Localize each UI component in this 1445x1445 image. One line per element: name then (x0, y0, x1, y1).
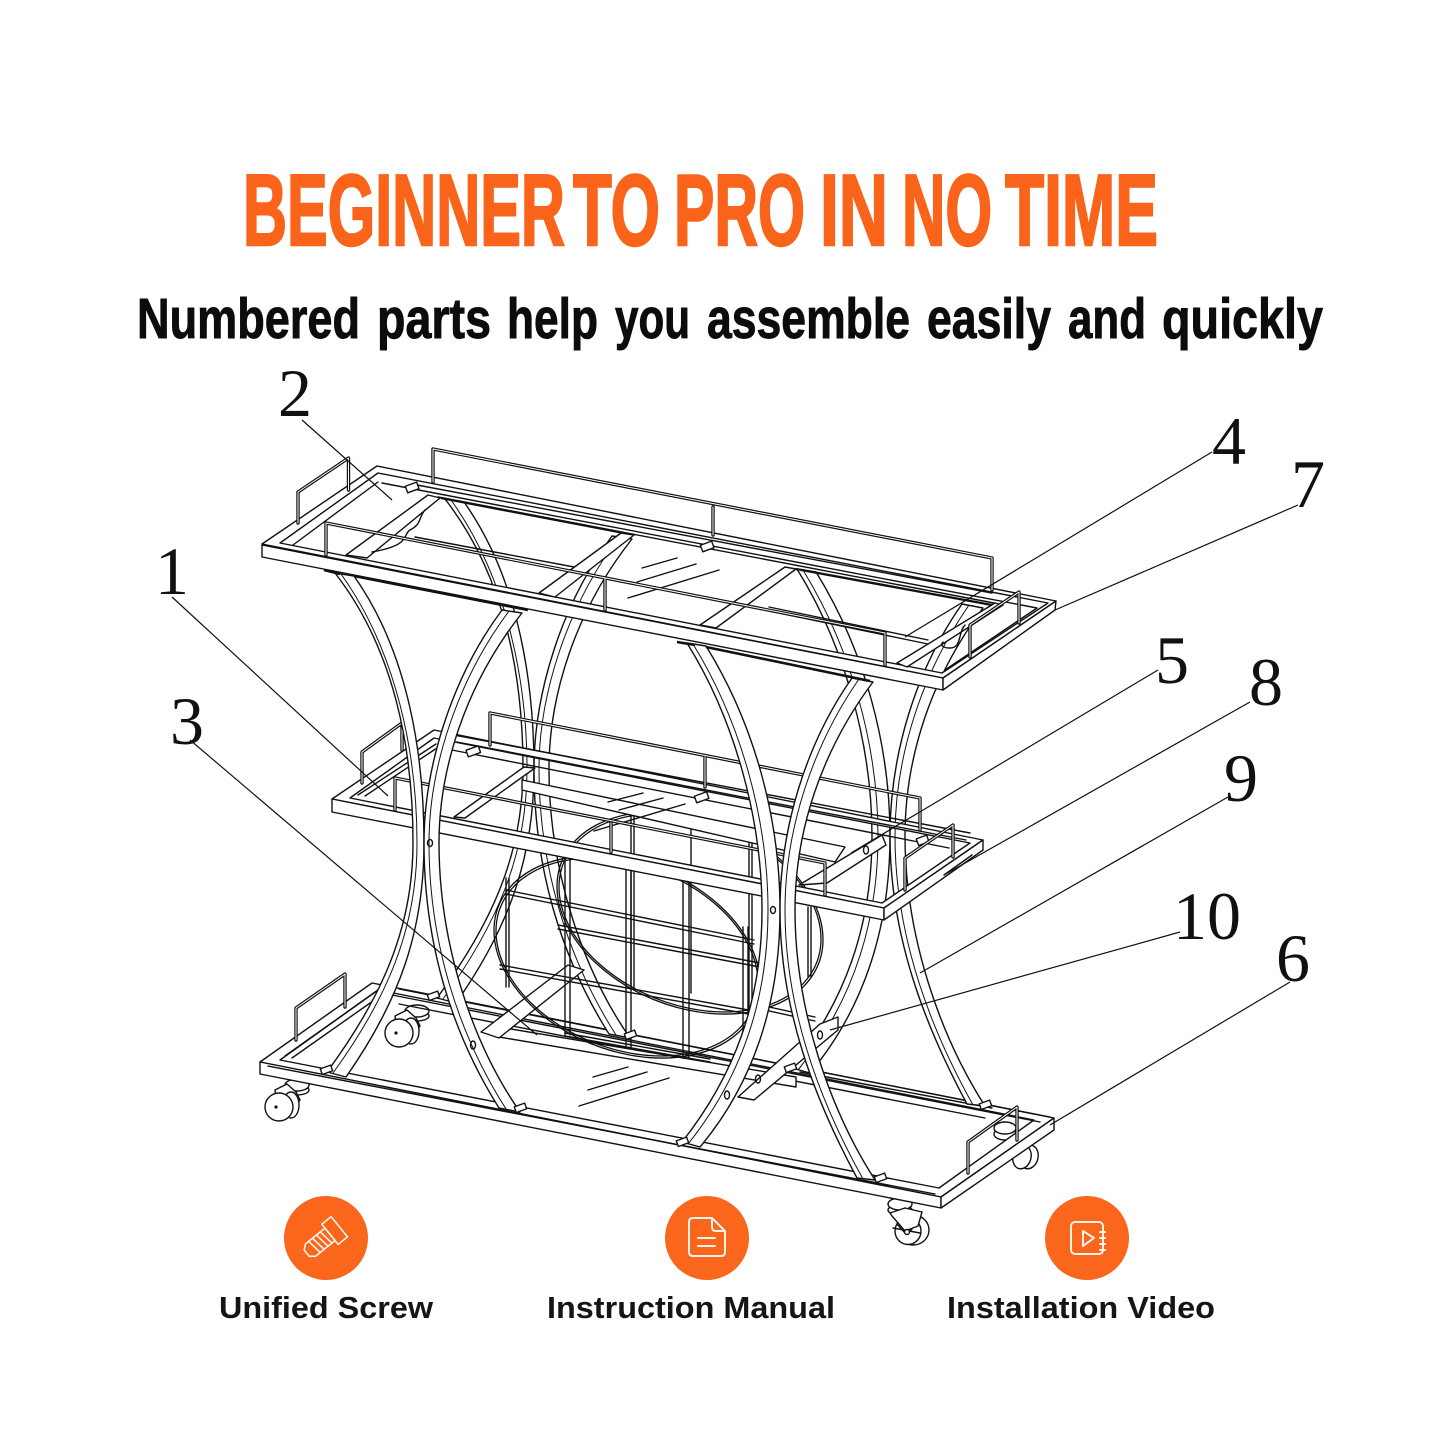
subtitle: easily (927, 287, 1051, 351)
icon: screw (284, 1196, 368, 1280)
title: NO (902, 155, 992, 267)
subtitle: quickly (1162, 287, 1323, 351)
label: unified screw: Unified Screw (219, 1290, 434, 1325)
back legs (437, 499, 985, 1106)
bottom cross beam right (738, 1017, 838, 1100)
part numbers: 10 (1173, 878, 1241, 954)
label: instruction manual: Instruction Manual (547, 1290, 835, 1325)
top shelf glass marks (628, 558, 719, 598)
title (243, 155, 1158, 267)
subtitle: help (507, 287, 598, 351)
subtitle: assemble (707, 287, 910, 351)
top shelf (262, 466, 1056, 690)
bottom shelf brackets (320, 991, 992, 1183)
title: BEGINNER (243, 155, 565, 267)
middle shelf guards (362, 713, 953, 895)
title: TIME (1005, 155, 1158, 267)
bottom shelf (260, 983, 1054, 1208)
title: TO (573, 155, 660, 267)
bottom shelf glass marks (579, 1067, 669, 1106)
part numbers: 4 (1212, 403, 1246, 479)
caster: front left (265, 1079, 309, 1121)
top shelf guards (298, 449, 1019, 665)
icon: video (1045, 1196, 1129, 1280)
part numbers: 6 (1276, 920, 1310, 996)
diagram: bar cart line drawing (260, 449, 1056, 1245)
part numbers: 7 (1291, 446, 1325, 522)
wine rack grid (500, 813, 815, 1062)
top shelf brackets (405, 482, 714, 552)
leader lines (172, 420, 1298, 1125)
caster: back left (385, 1005, 429, 1047)
bottom shelf guards (296, 974, 1017, 1173)
subtitle: you (615, 287, 690, 351)
subtitle: parts (377, 287, 491, 351)
part numbers: 9 (1224, 740, 1258, 816)
feature: instruction manual (547, 1196, 835, 1325)
feature: installation video (947, 1196, 1215, 1325)
feature: unified screw (219, 1196, 434, 1325)
part numbers: 8 (1249, 644, 1283, 720)
part numbers: 5 (1155, 622, 1189, 698)
label: installation video: Installation Video (947, 1290, 1215, 1325)
middle shelf brackets (466, 746, 929, 845)
caster: back right (994, 1122, 1041, 1171)
top shelf underside shadows (324, 570, 870, 681)
middle shelf glass marks (594, 793, 685, 831)
subtitle: and (1068, 287, 1146, 351)
subtitle: Numbered (137, 287, 360, 351)
part numbers (155, 355, 1325, 996)
part numbers: 1 (155, 533, 189, 609)
wine rack rings (494, 789, 823, 1081)
middle shelf (332, 730, 983, 920)
title: IN (820, 155, 888, 267)
subtitle (137, 287, 1323, 351)
caster: front right (888, 1198, 929, 1245)
front legs (327, 573, 875, 1180)
bottom cross beam left (481, 965, 584, 1038)
part numbers: 3 (170, 683, 204, 759)
icon: document (665, 1196, 749, 1280)
part numbers: 2 (278, 355, 312, 431)
title: PRO (674, 155, 805, 267)
